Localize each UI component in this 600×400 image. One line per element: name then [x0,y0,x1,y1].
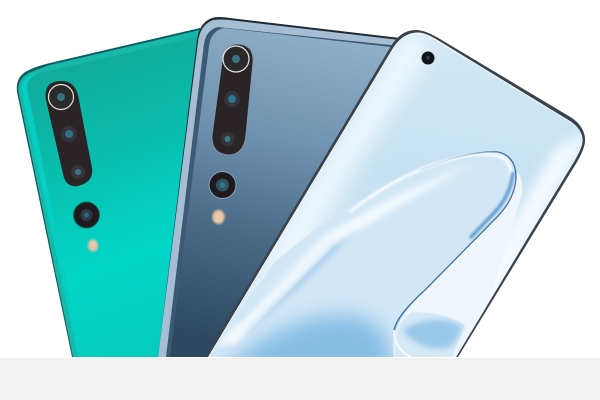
camera module: grey phone [212,44,253,155]
phone: grey-blue back [158,17,400,357]
phone: front screen with swirl wallpaper [205,30,586,357]
footer band [0,358,600,400]
swirl line [394,152,516,330]
phone: green back [17,28,210,357]
punch-hole camera [422,52,434,64]
flash: grey phone [212,210,224,224]
second camera: green phone [73,202,100,228]
wallpaper highlights [209,34,582,357]
camera module: green phone [46,81,92,186]
flash: green phone [88,240,98,252]
second camera: grey phone [208,171,236,199]
